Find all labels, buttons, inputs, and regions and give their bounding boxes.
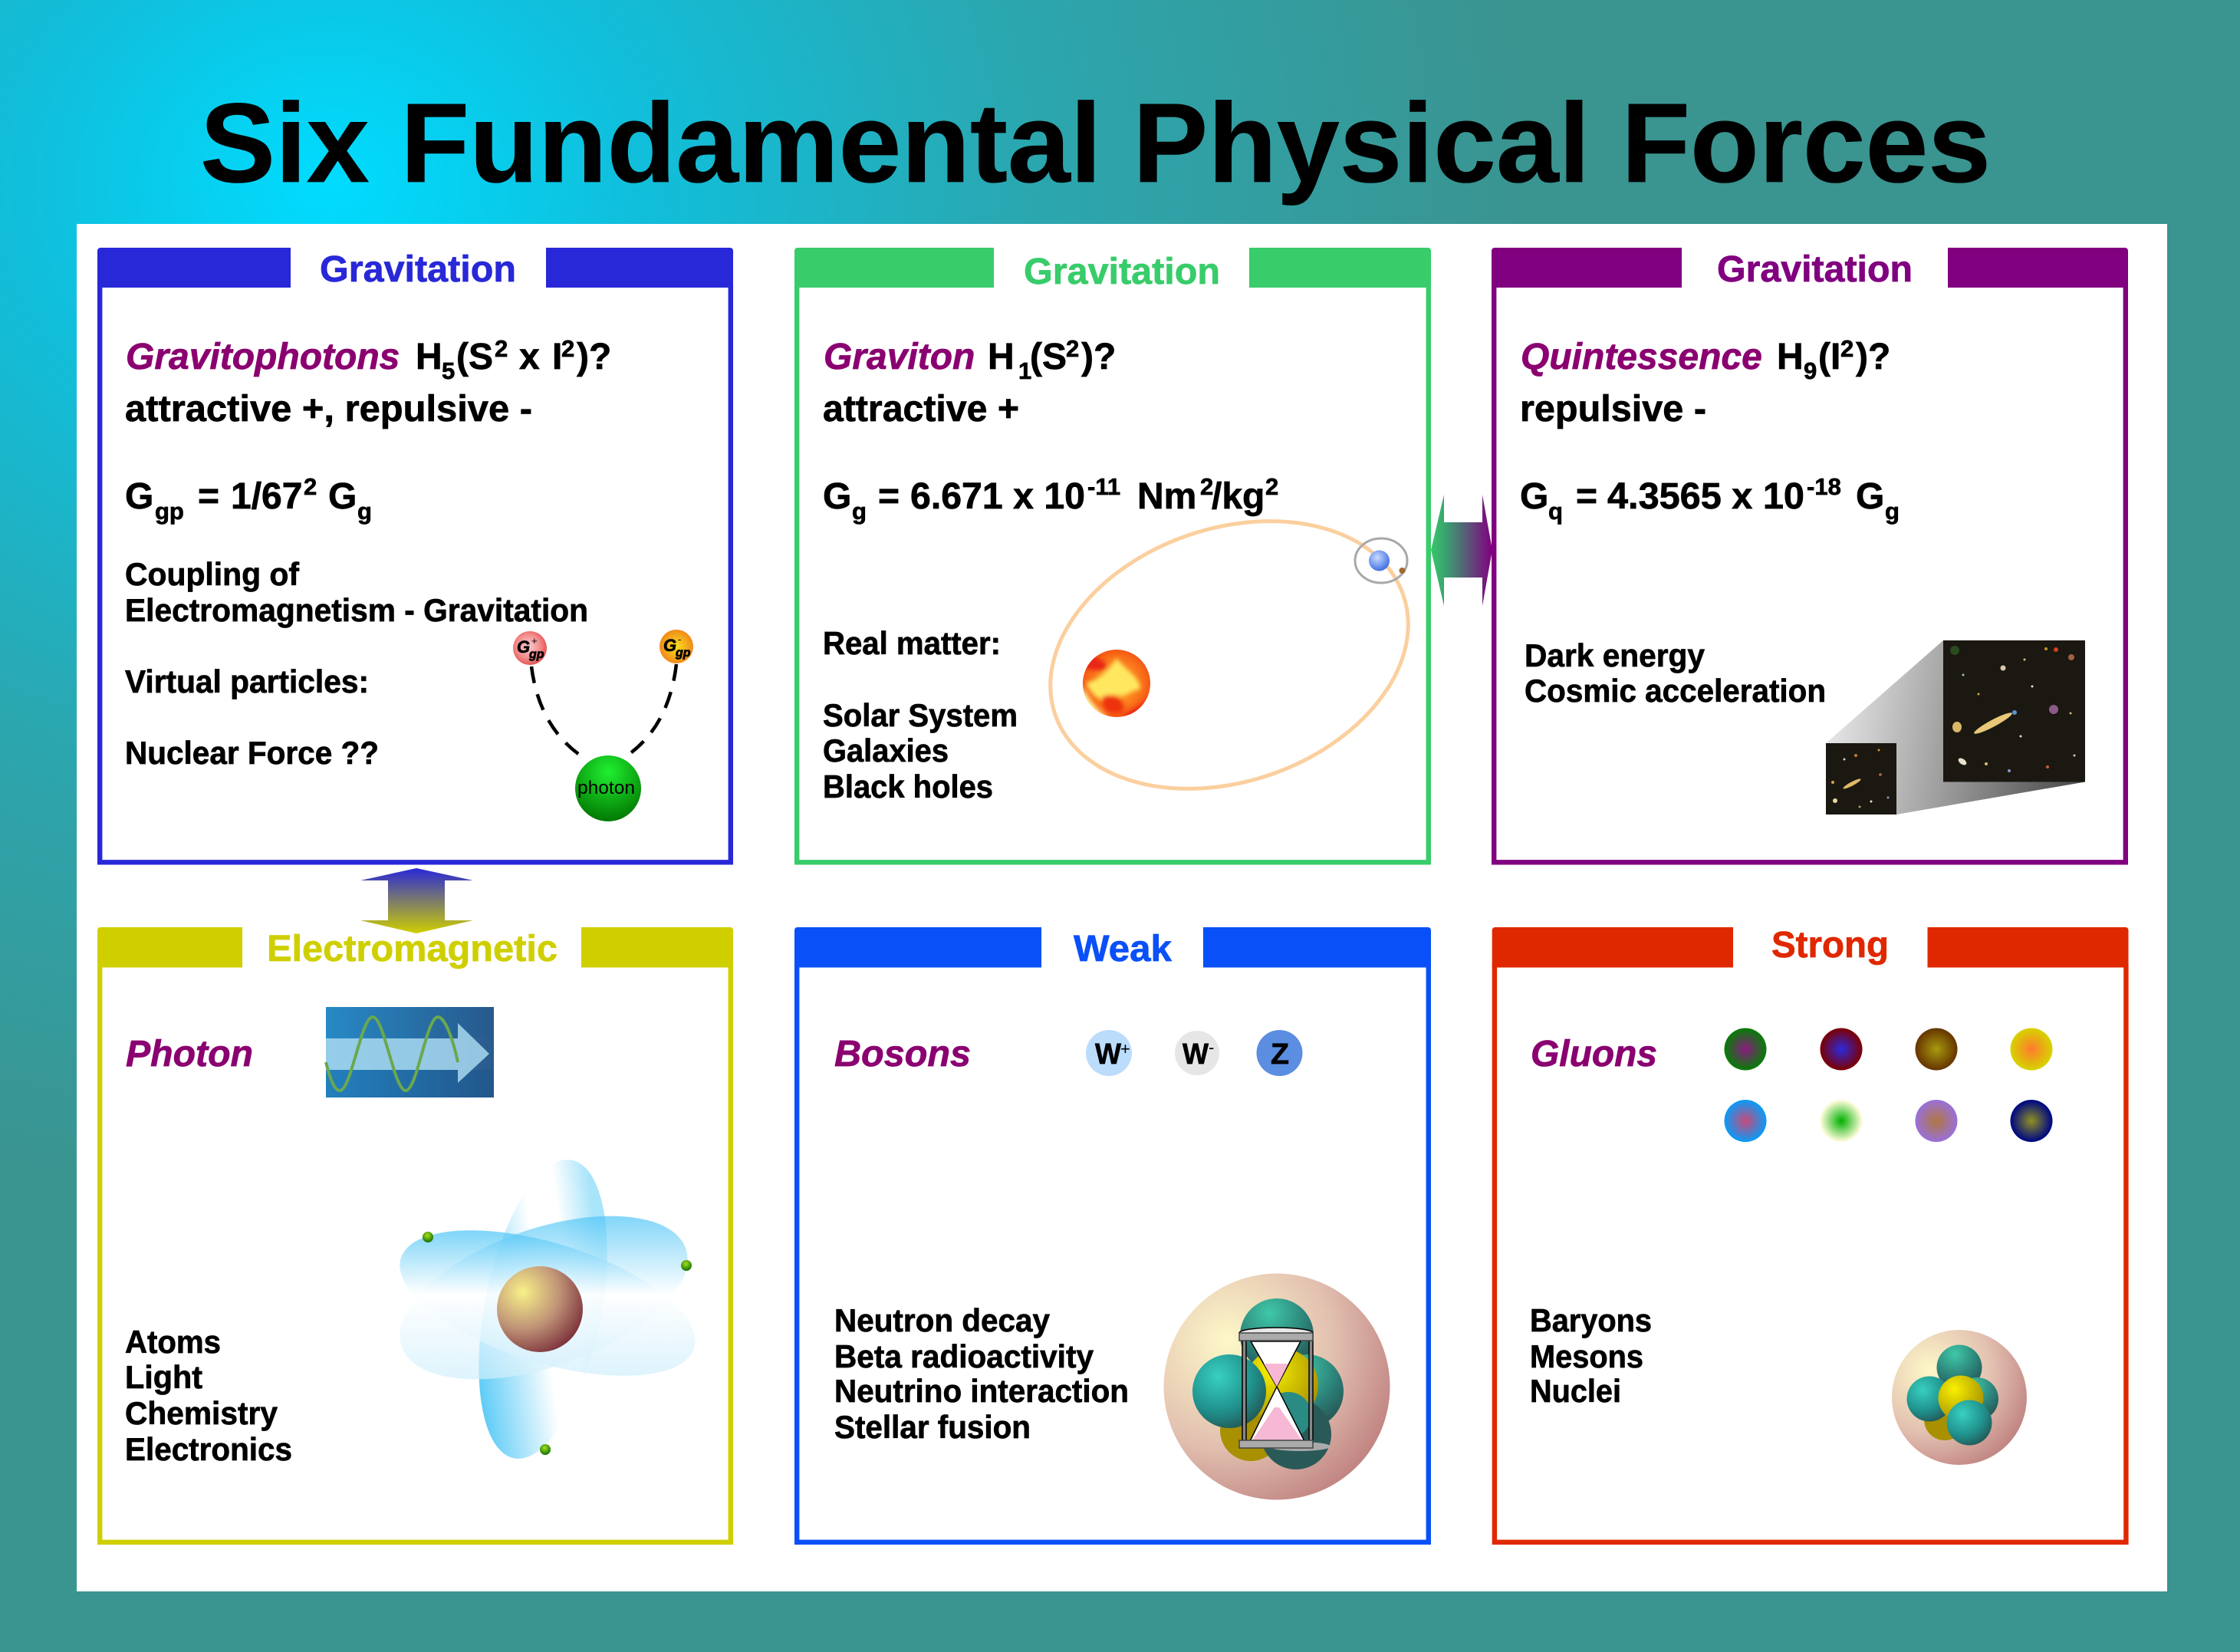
diagram: atom [379, 1149, 712, 1469]
diagram: nucleus with hourglass [1164, 1273, 1390, 1500]
formula: particle name: I [552, 337, 562, 377]
coupling constant: 2 [1265, 473, 1278, 500]
coupling constant: q [1548, 498, 1563, 525]
formula: particle name: )? [577, 337, 611, 377]
coupling constant: 2 [1200, 473, 1213, 500]
diagram: orbit with sun and planet [1048, 519, 1410, 791]
arrow: gravitation to quintessence [1431, 495, 1492, 606]
description text: Black holes [823, 768, 993, 805]
diagram: virtual particles: G [517, 637, 530, 657]
description text [823, 625, 1018, 805]
formula: particle name: 2 [1066, 335, 1079, 362]
formula: particle name: H [988, 337, 1015, 377]
formula: particle name: 2 [1840, 335, 1854, 362]
coupling constant: = [878, 476, 900, 517]
icon: hourglass [1239, 1328, 1331, 1451]
description text: Nuclei [1530, 1373, 1621, 1409]
coupling constant: = [1576, 476, 1597, 517]
coupling constant: 6.671 x 10 [910, 476, 1085, 517]
diagram: nucleus [1892, 1330, 2027, 1465]
icons: bosons: + [1120, 1039, 1130, 1058]
heading: Strong [1771, 925, 1889, 966]
description text: Light [125, 1359, 202, 1395]
coupling constant: G [328, 476, 357, 517]
description text: Solar System [823, 697, 1018, 733]
panel: electromagnetic [97, 927, 733, 1542]
diagram: virtual particles [513, 630, 693, 821]
formula: particle name: )? [1081, 337, 1116, 377]
heading: Gravitation [1717, 249, 1913, 290]
description text [834, 1302, 1129, 1445]
description text: Electromagnetism - Gravitation [125, 592, 588, 628]
description text [1525, 637, 1826, 709]
description text: Dark energy [1525, 637, 1705, 673]
description text: Virtual particles: [125, 663, 369, 699]
formula: particle name: H [416, 337, 442, 377]
particle name: Bosons [834, 1034, 971, 1074]
coupling constant: = [198, 476, 219, 517]
formula: particle name: )? [1856, 337, 1890, 377]
panel: gravitation quintessence [1492, 248, 2128, 862]
coupling constant: Nm [1137, 476, 1196, 517]
diagram: virtual particles: photon [577, 778, 635, 798]
description text: Electronics [125, 1431, 292, 1467]
coupling constant: G [823, 476, 851, 517]
coupling constant: g [852, 498, 867, 525]
diagram: virtual particles: gp [675, 647, 691, 660]
charge text: repulsive - [1520, 389, 1706, 429]
icons: bosons: W [1095, 1038, 1121, 1071]
arrow: electromagnetic to gravitation [360, 868, 473, 933]
image: deep field zoom [1826, 640, 2085, 814]
coupling constant: /kg [1212, 476, 1265, 517]
coupling constant: -18 [1807, 473, 1841, 500]
formula: particle name: 5 [442, 357, 455, 384]
coupling constant: g [1885, 498, 1900, 525]
coupling constant: 1/67 [231, 476, 302, 517]
coupling constant: G [1856, 476, 1884, 517]
description text: Nuclear Force ?? [125, 735, 379, 771]
panel: strong [1492, 925, 2129, 1542]
diagram: virtual particles: + [531, 635, 538, 647]
title: Six Fundamental Physical Forces [200, 81, 1991, 206]
heading: Electromagnetic [267, 929, 558, 969]
description text: Chemistry [125, 1395, 278, 1431]
coupling constant: 4.3565 x 10 [1607, 476, 1804, 517]
description text: Coupling of [125, 556, 300, 592]
charge text: attractive + [823, 389, 1019, 429]
formula: particle name: (I [1818, 337, 1840, 377]
charge text: attractive +, repulsive - [125, 389, 532, 429]
heading: Weak [1074, 929, 1172, 969]
icon: photon wave [326, 1007, 494, 1097]
description text [125, 556, 588, 771]
formula: particle name: 9 [1804, 357, 1817, 384]
diagram: virtual particles: - [678, 633, 681, 645]
icons: bosons: - [1209, 1038, 1214, 1057]
formula: particle name: Graviton [824, 337, 975, 377]
coupling constant: gp [155, 498, 184, 525]
description text [125, 1324, 292, 1467]
formula: particle name: (S [1030, 337, 1067, 377]
coupling constant: g [357, 498, 372, 525]
white content panel [77, 224, 2167, 1591]
diagram: virtual particles: G [663, 636, 676, 655]
heading: Gravitation [320, 249, 516, 290]
icons: bosons: Z [1271, 1038, 1289, 1071]
description text: Mesons [1530, 1338, 1643, 1374]
description text: Stellar fusion [834, 1409, 1031, 1445]
description text: Galaxies [823, 732, 949, 768]
icons: bosons: W [1182, 1038, 1209, 1071]
description text [1530, 1302, 1652, 1409]
description text: Cosmic acceleration [1525, 673, 1826, 709]
panel: gravitation graviton [794, 248, 1445, 862]
description text: Beta radioactivity [834, 1338, 1094, 1374]
formula: particle name: 1 [1018, 357, 1031, 384]
particle name: Photon [126, 1034, 253, 1074]
particle name: Gluons [1531, 1034, 1657, 1074]
formula: particle name: Quintessence [1521, 337, 1762, 377]
formula: particle name: 2 [495, 335, 508, 362]
coupling constant: -11 [1087, 473, 1120, 500]
panel: weak [794, 927, 1431, 1542]
heading: Gravitation [1024, 252, 1220, 292]
formula: particle name: H [1777, 337, 1804, 377]
formula: particle name: 2 [561, 335, 574, 362]
coupling constant: G [1520, 476, 1548, 517]
formula: particle name: x [519, 337, 540, 377]
description text: Real matter: [823, 625, 1001, 661]
description text: Baryons [1530, 1302, 1652, 1338]
description text: Neutrino interaction [834, 1373, 1129, 1409]
icons: gluons [1724, 1028, 2052, 1142]
coupling constant: G [125, 476, 153, 517]
formula: particle name: Gravitophotons [126, 337, 400, 377]
diagram: virtual particles: gp [528, 648, 544, 661]
icons: bosons [1086, 1030, 1302, 1076]
panel: gravitation gravitophotons [97, 248, 733, 862]
description text: Neutron decay [834, 1302, 1051, 1338]
description text: Atoms [125, 1324, 221, 1360]
formula: particle name: (S [456, 337, 493, 377]
coupling constant: 2 [304, 473, 317, 500]
